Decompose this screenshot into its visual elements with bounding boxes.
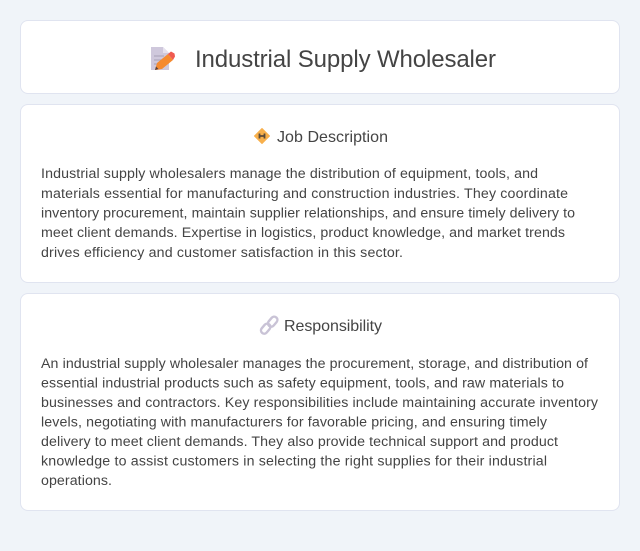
text block: responsibility: An industrial supply wholesaler manages the procurement, storage, and distribution of bbox=[41, 356, 588, 372]
title: Industrial Supply Wholesaler bbox=[195, 46, 496, 73]
text block: responsibility: operations. bbox=[41, 473, 112, 489]
heading: job description: Job Description bbox=[277, 129, 388, 146]
text block: responsibility: essential industrial products such as safety equipment, tools, and raw materials to bbox=[41, 376, 564, 392]
icon: chain link bbox=[260, 315, 279, 335]
text block: responsibility: delivery to meet client demands. They also provide technical support and product bbox=[41, 434, 558, 450]
text block: responsibility: businesses and contractors. Key responsibilities include maintaining accurate inventory bbox=[41, 395, 599, 411]
text block: job description: materials essential for manufacturing and construction industries. They coordinate bbox=[41, 186, 568, 202]
heading: responsibility: Responsibility bbox=[284, 318, 382, 335]
panel: title card bbox=[20, 20, 620, 94]
text block: responsibility bbox=[41, 356, 599, 489]
panel: job description card bbox=[20, 104, 620, 283]
icon: road sign diamond bbox=[254, 128, 270, 144]
text block: job description: inventory procurement, maintain supplier relationships, and ensure timely delivery to bbox=[41, 206, 575, 222]
text block: job description: drives efficiency and customer satisfaction in this sector. bbox=[41, 245, 403, 261]
text block: job description: meet client demands. Expertise in logistics, product knowledge, and market trends bbox=[41, 225, 565, 241]
text block: responsibility: knowledge to assist customers in selecting the right supplies for their industrial bbox=[41, 454, 547, 470]
panel: responsibility card bbox=[20, 293, 620, 511]
text block: job description bbox=[41, 166, 575, 261]
text block: responsibility: levels, negotiating with manufacturers for favorable pricing, and ensuring timely bbox=[41, 414, 548, 430]
text block: job description: Industrial supply wholesalers manage the distribution of equipment, tools, and bbox=[41, 166, 538, 182]
icon: document with pencil bbox=[151, 47, 175, 70]
